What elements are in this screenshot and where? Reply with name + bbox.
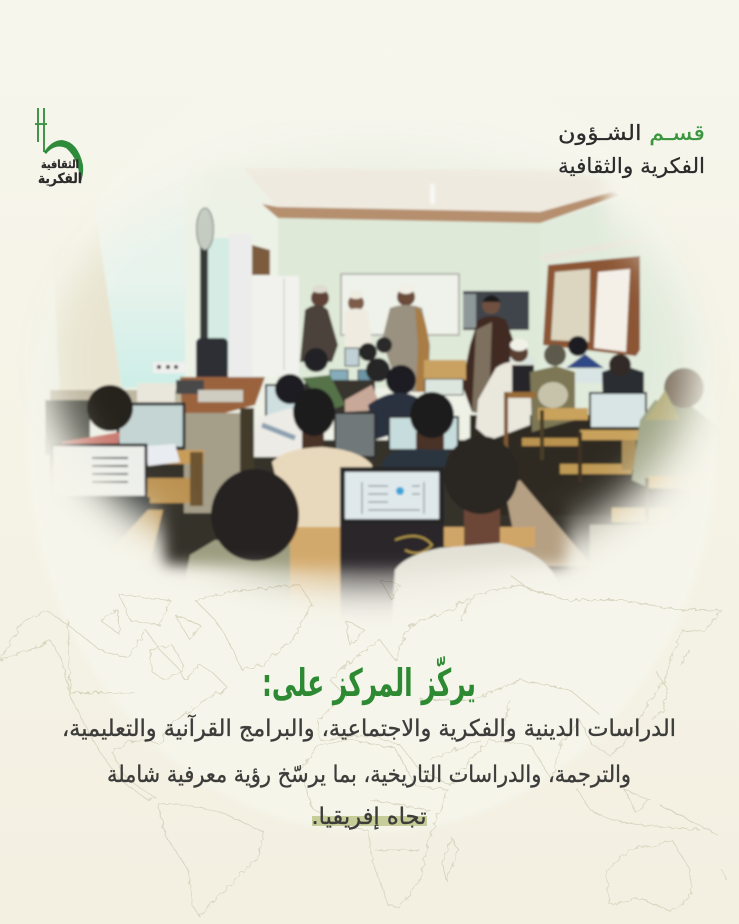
body text <box>62 714 676 830</box>
body line 1: الدراسات الدينية والفكرية والاجتماعية، والبرامج القرآنية والتعليمية، <box>62 714 676 742</box>
body line 2: والترجمة، والدراسات التاريخية، بما يرسّخ رؤية معرفية شاملة <box>107 762 631 788</box>
title line 2: الفكرية والثقافية <box>558 154 705 178</box>
room walls <box>56 178 699 578</box>
logo dome <box>44 140 83 184</box>
department title <box>558 121 705 178</box>
window <box>542 255 642 358</box>
ceiling <box>262 185 618 224</box>
standing men <box>300 284 515 415</box>
central laptop and desk <box>287 466 536 609</box>
logo calligraphy <box>38 158 82 187</box>
door, clock and cabinet <box>153 208 299 385</box>
highlight <box>312 816 427 826</box>
title line 1: قسـم الشـؤون <box>558 121 705 146</box>
whiteboard <box>341 274 459 335</box>
classroom photo <box>44 168 709 613</box>
back row monitors and students <box>250 337 463 457</box>
logo <box>35 108 83 187</box>
right side students and desks <box>468 334 707 568</box>
left counter and desk <box>44 375 266 554</box>
heading: يركّز المركز على: <box>262 656 476 705</box>
world map outline <box>0 575 726 917</box>
middle students <box>272 388 458 528</box>
logo minaret <box>35 108 47 152</box>
front students <box>186 435 554 611</box>
table at front of the room <box>424 360 466 380</box>
logo calligraphy: الثقافية <box>41 158 79 171</box>
logo calligraphy: الفكرية <box>38 171 82 187</box>
body line 3: تجاه إفريقيا. <box>312 804 426 830</box>
television <box>463 291 529 330</box>
soft background circle <box>27 48 717 832</box>
